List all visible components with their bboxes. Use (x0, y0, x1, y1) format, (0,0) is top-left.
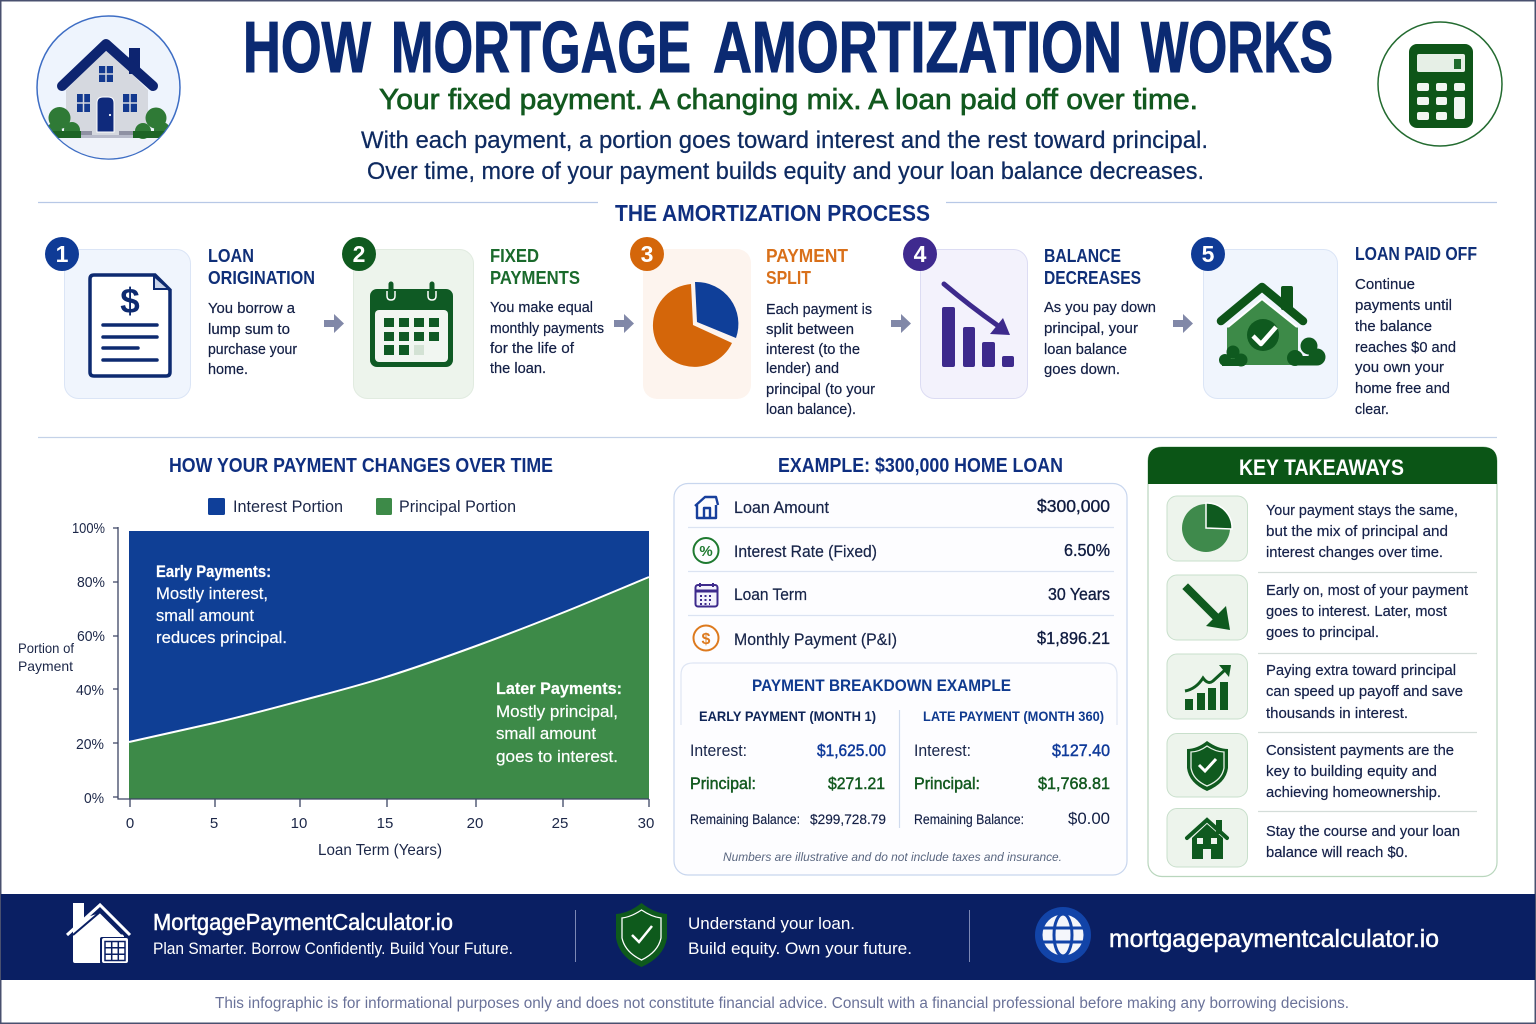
tagline: Build equity. Own your future. (688, 939, 912, 958)
panel: payment breakdown: EARLY PAYMENT (MONTH 1) (699, 708, 876, 724)
step 3: payment split (630, 237, 875, 418)
x axis labels: 25 (552, 815, 568, 832)
step 5: loan paid off: clear. (1355, 401, 1389, 418)
annotation: early payments: reduces principal. (156, 628, 287, 647)
step 3: payment split: loan balance). (766, 401, 856, 418)
icon: calendar (370, 284, 453, 367)
title: MORTGAGE (391, 8, 691, 88)
step 2: fixed payments: 2 (353, 241, 365, 267)
takeaway 4: Consistent payments are the (1266, 743, 1454, 759)
step 4: balance decreases: goes down. (1044, 361, 1120, 378)
step 1: loan origination: You borrow a (208, 300, 296, 317)
y axis labels (72, 520, 105, 807)
column: late payment: $127.40 (1052, 742, 1110, 760)
column: early payment: Interest: (690, 742, 747, 760)
takeaway 5: balance will reach $0. (1266, 845, 1408, 861)
heading: the amortization process: THE AMORTIZATION PROCESS (615, 200, 930, 226)
step 2: fixed payments: You make equal (490, 299, 593, 316)
row: loan amount (734, 496, 1110, 517)
step 3: payment split: lender) and (766, 360, 839, 377)
title: HOW (243, 8, 371, 88)
title (243, 8, 1333, 88)
step 3: payment split: interest (to the (766, 341, 860, 358)
column: early payment: $271.21 (828, 775, 885, 793)
icon: pie chart (653, 282, 738, 367)
area chart (18, 520, 654, 859)
row: interest rate (734, 540, 1110, 561)
legend: Interest Portion (233, 498, 343, 516)
x axis labels: 30 (638, 815, 654, 832)
legend (208, 498, 516, 516)
icon: document: $ (120, 282, 140, 321)
column: late payment: Principal: (914, 775, 980, 793)
column: early payment: $299,728.79 (810, 812, 886, 827)
step 4: balance decreases: As you pay down (1044, 299, 1156, 316)
takeaway 1 (1167, 496, 1458, 561)
step 1: loan origination: ORIGINATION (208, 268, 315, 288)
annotation: later payments: Later Payments: (496, 679, 622, 698)
takeaway 4: achieving homeownership. (1266, 785, 1441, 801)
column: late payment: $0.00 (1068, 810, 1110, 828)
row: loan term: 30 Years (1048, 584, 1110, 604)
row: interest rate: 6.50% (1064, 540, 1110, 560)
annotation: early payments: small amount (156, 606, 254, 625)
icon: calculator (1378, 22, 1502, 146)
icon: dollar (694, 626, 718, 650)
title: WORKS (1141, 8, 1333, 88)
row: loan term: Loan Term (734, 586, 807, 604)
step 2: fixed payments: FIXED (490, 246, 539, 266)
y axis title: Payment (18, 658, 73, 674)
column: late payment (914, 742, 1110, 828)
row: interest rate: Interest Rate (Fixed) (734, 543, 877, 561)
takeaway 5: Stay the course and your loan (1266, 824, 1460, 840)
x axis labels (126, 815, 654, 832)
step 4: balance decreases: BALANCE (1044, 246, 1121, 266)
tagline: Understand your loan. (688, 914, 855, 933)
step 3: payment split: Each payment is (766, 301, 872, 318)
step 2: fixed payments: for the life of (490, 340, 575, 357)
annotation: later payments: Mostly principal, (496, 702, 618, 721)
takeaway 1: but the mix of principal and (1266, 524, 1448, 540)
step 1: loan origination (45, 237, 315, 398)
step 3: payment split: 3 (641, 241, 653, 267)
icon: percent: % (699, 543, 713, 560)
step 5: loan paid off: you own your (1355, 359, 1444, 376)
subtitle: Your fixed payment. A changing mix. A loan paid off over time. (379, 84, 1198, 116)
header: key takeaways (1148, 447, 1497, 484)
column: late payment: Remaining Balance: (914, 812, 1024, 827)
column: early payment (690, 742, 886, 827)
icon: shield (616, 903, 667, 967)
x axis labels: 15 (377, 815, 393, 832)
tagline (688, 914, 912, 958)
footnote: Numbers are illustrative and do not include taxes and insurance. (723, 850, 1062, 864)
arrow: step 4 to 5 (1173, 314, 1193, 333)
panel: key takeaways (1148, 447, 1497, 876)
takeaway 3: can speed up payoff and save (1266, 684, 1463, 700)
column: early payment: $1,625.00 (817, 742, 886, 760)
step 5: loan paid off (1191, 237, 1477, 418)
icon: percent (694, 538, 718, 563)
step 4: balance decreases: DECREASES (1044, 268, 1141, 288)
annotation: later payments: small amount (496, 724, 596, 743)
step 5: loan paid off: Continue (1355, 276, 1415, 293)
arrow: step 3 to 4 (891, 314, 911, 333)
step 3: payment split: PAYMENT (766, 246, 848, 266)
x axis labels: 5 (210, 815, 218, 832)
panel: payment breakdown: PAYMENT BREAKDOWN EXAMPLE (752, 676, 1011, 695)
x axis labels: 20 (467, 815, 483, 832)
step 3: payment split: split between (766, 321, 854, 338)
heading: example: EXAMPLE: $300,000 HOME LOAN (778, 455, 1063, 477)
y axis labels: 0% (84, 790, 104, 807)
step 1: loan origination: lump sum to (208, 321, 290, 338)
row: loan amount: $300,000 (1037, 496, 1110, 516)
annotation: early payments: Early Payments: (156, 562, 271, 581)
step 4: balance decreases (903, 237, 1156, 398)
column: early payment: Remaining Balance: (690, 812, 800, 827)
brand text: MortgagePaymentCalculator.io (153, 909, 453, 935)
y axis labels: 100% (72, 520, 105, 537)
row: loan amount: Loan Amount (734, 499, 829, 517)
y axis labels: 80% (77, 574, 105, 591)
brand text: Plan Smarter. Borrow Confidently. Build Your Future. (153, 940, 513, 958)
takeaway 2: Early on, most of your payment (1266, 583, 1468, 599)
takeaway 4: key to building equity and (1266, 764, 1437, 780)
icon: home (695, 497, 718, 518)
icon: house logo (30, 16, 190, 161)
takeaway 3: thousands in interest. (1266, 706, 1408, 722)
column: late payment: Interest: (914, 742, 971, 760)
y axis labels: 60% (77, 628, 105, 645)
arrow: step 2 to 3 (614, 314, 634, 333)
website url: mortgagepaymentcalculator.io (1109, 925, 1439, 953)
row: monthly payment: $1,896.21 (1037, 628, 1110, 648)
takeaway 2 (1167, 575, 1468, 641)
takeaway 1: Your payment stays the same, (1266, 503, 1458, 519)
y axis labels: 40% (76, 682, 104, 699)
row: monthly payment (734, 628, 1110, 649)
step 2: fixed payments: monthly payments (490, 320, 604, 337)
takeaway 3: Paying extra toward principal (1266, 663, 1456, 679)
step 4: balance decreases: 4 (914, 241, 927, 267)
takeaway 2: goes to interest. Later, most (1266, 604, 1447, 620)
takeaway 5 (1167, 808, 1460, 867)
column: early payment: Principal: (690, 775, 756, 793)
brand text (153, 909, 513, 958)
annotation: later payments (496, 679, 622, 766)
panel: payment breakdown (681, 663, 1117, 828)
arrow: step 1 to 2 (324, 314, 344, 333)
y axis labels: 20% (76, 736, 104, 753)
x axis title: Loan Term (Years) (318, 842, 442, 859)
takeaway 4 (1167, 734, 1454, 801)
step 1: loan origination: 1 (56, 241, 69, 267)
panel: loan example (674, 484, 1127, 875)
legend: Principal Portion (399, 498, 516, 516)
step 1: loan origination: purchase your (208, 341, 297, 358)
step 5: loan paid off: LOAN PAID OFF (1355, 244, 1477, 264)
step 2: fixed payments: the loan. (490, 360, 546, 377)
icon: globe (1035, 907, 1091, 963)
step 2: fixed payments (342, 237, 604, 398)
step 4: balance decreases: principal, your (1044, 320, 1138, 337)
step 5: loan paid off: the balance (1355, 318, 1432, 335)
column: late payment: $1,768.81 (1038, 775, 1110, 793)
intro text: Over time, more of your payment builds equity and your loan balance decreases. (367, 158, 1204, 185)
takeaway 3 (1167, 654, 1463, 722)
row: loan term (734, 584, 1110, 604)
step 5: loan paid off: home free and (1355, 380, 1450, 397)
icon: falling bars (942, 284, 1014, 367)
intro text (361, 127, 1208, 185)
heading: how your payment changes: HOW YOUR PAYMENT CHANGES OVER TIME (169, 455, 553, 477)
takeaway 2: goes to principal. (1266, 625, 1379, 641)
x axis labels: 0 (126, 815, 134, 832)
takeaway 1: interest changes over time. (1266, 545, 1443, 561)
step 1: loan origination: LOAN (208, 246, 254, 266)
step 1: loan origination: home. (208, 361, 248, 378)
step 2: fixed payments: PAYMENTS (490, 268, 580, 288)
step 5: loan paid off: reaches $0 and (1355, 339, 1456, 356)
step 5: loan paid off: 5 (1202, 241, 1215, 267)
panel: payment breakdown: LATE PAYMENT (MONTH 360) (923, 708, 1104, 724)
x axis labels: 10 (291, 815, 307, 832)
icon: calendar (696, 583, 718, 606)
intro text: With each payment, a portion goes toward interest and the rest toward principal. (361, 127, 1208, 154)
title: AMORTIZATION (713, 8, 1122, 88)
step 3: payment split: principal (to your (766, 381, 875, 398)
annotation: early payments (156, 562, 287, 647)
icon: document (90, 275, 170, 376)
icon: dollar: $ (702, 631, 711, 648)
footer band (1, 894, 1535, 980)
icon: footer house logo (67, 903, 130, 964)
y axis title (18, 640, 74, 674)
y axis title: Portion of (18, 640, 74, 656)
step 3: payment split: SPLIT (766, 268, 811, 288)
annotation: early payments: Mostly interest, (156, 584, 268, 603)
disclaimer: This infographic is for informational purposes only and does not constitute financial advice. Consult with a financial professional before making any borrowing decisions. (215, 995, 1349, 1012)
step 5: loan paid off: payments until (1355, 297, 1452, 314)
header: key takeaways: KEY TAKEAWAYS (1239, 455, 1404, 480)
row: monthly payment: Monthly Payment (P&I) (734, 631, 897, 649)
icon: paid-off house (1219, 286, 1326, 366)
annotation: later payments: goes to interest. (496, 747, 618, 766)
step 4: balance decreases: loan balance (1044, 341, 1127, 358)
